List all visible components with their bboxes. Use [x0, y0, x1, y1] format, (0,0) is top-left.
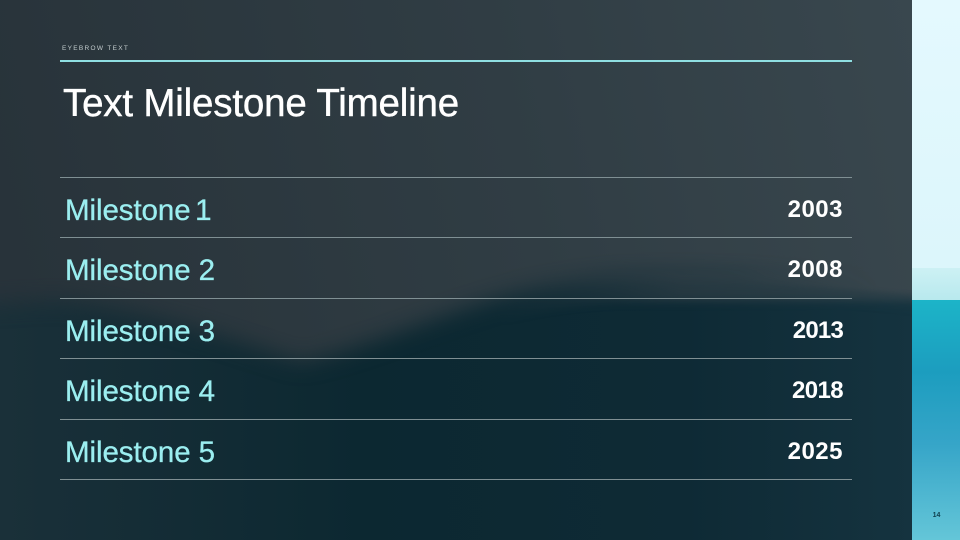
milestone row 4 — [65, 375, 843, 408]
milestone row 2 — [65, 254, 843, 287]
milestone row 1 — [65, 194, 843, 227]
milestone row 1: 2003 — [788, 196, 843, 223]
eyebrow text: EYEBROW TEXT — [62, 45, 129, 52]
milestone row 5: Milestone 5 — [65, 436, 215, 469]
milestone row 4: 2018 — [792, 377, 843, 404]
milestone row 4: Milestone 4 — [65, 375, 215, 408]
milestone row 3 — [65, 315, 843, 348]
milestone row 1: Milestone 1 — [65, 194, 211, 227]
header rule — [60, 60, 852, 62]
page number: 14 — [933, 512, 940, 519]
milestone row 2: 2008 — [788, 256, 843, 283]
milestone row 3: 2013 — [793, 317, 843, 344]
milestone row 2: Milestone 2 — [65, 254, 215, 287]
title: Text Milestone Timeline — [63, 82, 459, 125]
milestone row 5: 2025 — [788, 438, 843, 465]
milestone table — [60, 177, 852, 480]
milestone row 3: Milestone 3 — [65, 315, 215, 348]
milestone row 5 — [65, 436, 843, 469]
side panel — [912, 0, 960, 540]
